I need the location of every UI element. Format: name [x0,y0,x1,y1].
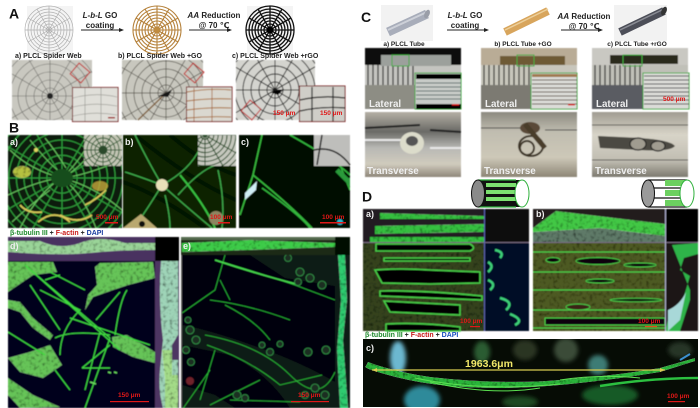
photo a: PLCL web [11,59,120,123]
scale c: 100 μm [667,393,690,400]
scale d: 150 μm [118,392,141,399]
scale c [320,214,346,224]
micrograph a [7,134,123,229]
caption c: c) PLCL Spider Web +rGO [232,53,319,60]
label d: d) [10,241,18,251]
label transverse b: Transverse [484,166,536,177]
arrow: AA reduction: AA Reduction [187,11,241,20]
transverse photo c [592,112,688,177]
label b: b) [536,209,544,219]
caption a: a) PLCL Spider Web [15,53,82,60]
scale a: 500 μm [96,214,119,221]
icon: GO tube [505,9,548,32]
label c: c) [366,343,374,353]
label c: c) [241,137,249,147]
arrow: coating: coating [451,21,479,30]
icon: PLCL tube [381,5,433,41]
scale label inset: 150 μm [320,110,343,117]
caption c: c) PLCL Tube +rGO [607,41,667,48]
icon: tube inner view [642,180,694,207]
photo c: rGO web [235,59,346,123]
lateral photo b [481,48,577,109]
arrow: AA reduction: @ 70 ℃ [199,21,230,30]
photo b: GO web [121,59,234,123]
arrow: coating [447,11,489,32]
scale e [291,392,329,402]
arrow: reduction [557,12,611,32]
label a: a) [366,209,374,219]
label lateral b: Lateral [485,99,517,110]
label e: e) [183,241,191,251]
measurement label: 1963.6μm [465,358,513,370]
panel label B: B [9,120,19,136]
lateral photo a [365,48,461,109]
caption a: a) PLCL Tube [383,41,425,48]
scale c: 100 μm [322,214,345,221]
arrow: coating: L-b-L GO [448,11,482,20]
scale e: 150 μm [298,392,321,399]
caption b: b) PLCL Spider Web +GO [118,53,203,60]
panel D: tube confocal images [362,180,698,408]
arrow: reduction: @ 70 ℃ [569,22,600,31]
arrow: L-b-L GO coating: coating [86,21,114,30]
micrograph b [533,209,698,331]
label transverse c: Transverse [595,166,647,177]
label transverse a: Transverse [367,166,419,177]
scale lateral c: 500 μm [663,96,686,103]
stain legend: β-tubulin III + F-actin + DAPI [365,332,458,339]
icon: rGO tube [614,5,668,41]
lateral photo c [592,48,689,109]
stain legend: β-tubulin III + F-actin + DAPI [10,230,103,237]
label lateral c: Lateral [596,99,628,110]
panel label A: A [9,6,19,22]
scale d [110,392,149,402]
scale b: 100 μm [638,318,661,325]
micrograph b [122,134,237,229]
arrow: AA reduction [187,11,241,32]
scale label: 150 μm [273,110,296,117]
arrow: reduction: AA Reduction [557,12,611,21]
micrograph c [239,135,350,228]
micrograph a [363,209,529,331]
transverse photo b [481,112,577,177]
panel label D: D [362,188,372,204]
micrograph d [8,237,179,408]
panel C: tube scaffolds [361,5,689,177]
label b: b) [125,137,134,147]
scale a: 100 μm [460,318,483,325]
icon: plain PLCL spider web [25,6,73,55]
arrow: L-b-L GO coating [81,11,124,32]
arrow: L-b-L GO coating: L-b-L GO [83,11,117,20]
caption b: b) PLCL Tube +GO [494,41,552,48]
micrograph c [363,338,698,408]
micrograph e [181,237,350,408]
panel label C: C [361,9,371,25]
label lateral a: Lateral [369,99,401,110]
panel B: neuron confocal images [7,123,352,408]
icon: rGO spider web [246,6,294,55]
label a: a) [10,137,18,147]
icon: GO coated spider web [133,6,181,54]
panel A: spider web scaffolds [9,5,346,123]
scale b: 100 μm [210,214,233,221]
transverse photo a [365,112,461,177]
icon: tube outer view [472,180,529,207]
